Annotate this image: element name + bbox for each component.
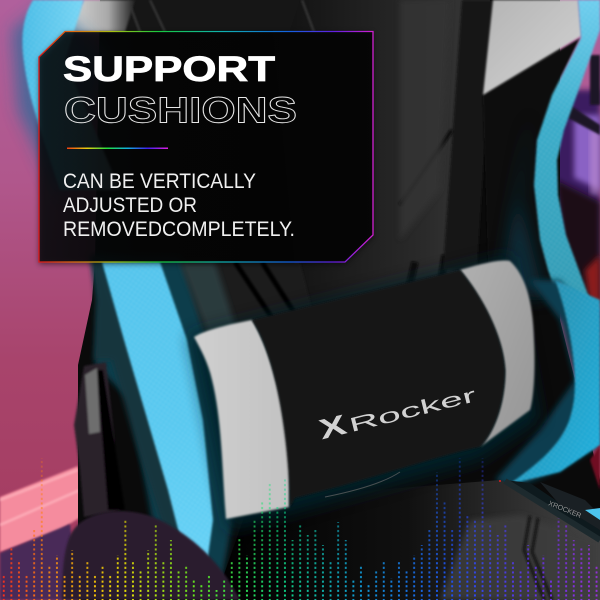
- heading: SUPPORT: SUPPORT: [63, 50, 275, 89]
- info panel: [39, 32, 373, 262]
- brand logo: X Rocker: [316, 376, 479, 445]
- chair: white upper side panels: [68, 0, 581, 95]
- body text: REMOVEDCOMPLETELY.: [63, 217, 295, 241]
- rainbow equalizer dots: [2, 458, 598, 600]
- cushion: black centre: [252, 270, 505, 507]
- rainbow divider: [67, 148, 168, 149]
- lumbar support cushion: [190, 255, 540, 530]
- chair: left upper bolster: [12, 0, 120, 200]
- recline lever mechanism: [74, 362, 125, 517]
- panel background and rainbow border: [39, 32, 373, 262]
- seat side cushion: [62, 511, 240, 600]
- cushion: lower crease: [325, 472, 400, 497]
- body text: [63, 169, 295, 241]
- body text: CAN BE VERTICALLY: [63, 169, 256, 193]
- chair: right upper bolster: [534, 0, 600, 310]
- panel shadow: [39, 33, 373, 264]
- cushion glow: [190, 255, 540, 530]
- heading: CUSHIONS outlined: CUSHIONS: [64, 90, 297, 130]
- body text: ADJUSTED OR: [63, 193, 197, 217]
- chair: right lower bolster: [495, 280, 600, 490]
- chair: seat base: [215, 480, 600, 600]
- cushion: left white end: [194, 320, 290, 519]
- chair: seat base: XROCKER: [547, 500, 582, 520]
- brand logo: X Rocker: Rocker: [347, 384, 479, 437]
- cushion: right white end: [460, 261, 535, 447]
- brand logo: X Rocker: X: [316, 409, 350, 445]
- chair: left lower bolster, teal edge and blue mesh: [90, 255, 240, 590]
